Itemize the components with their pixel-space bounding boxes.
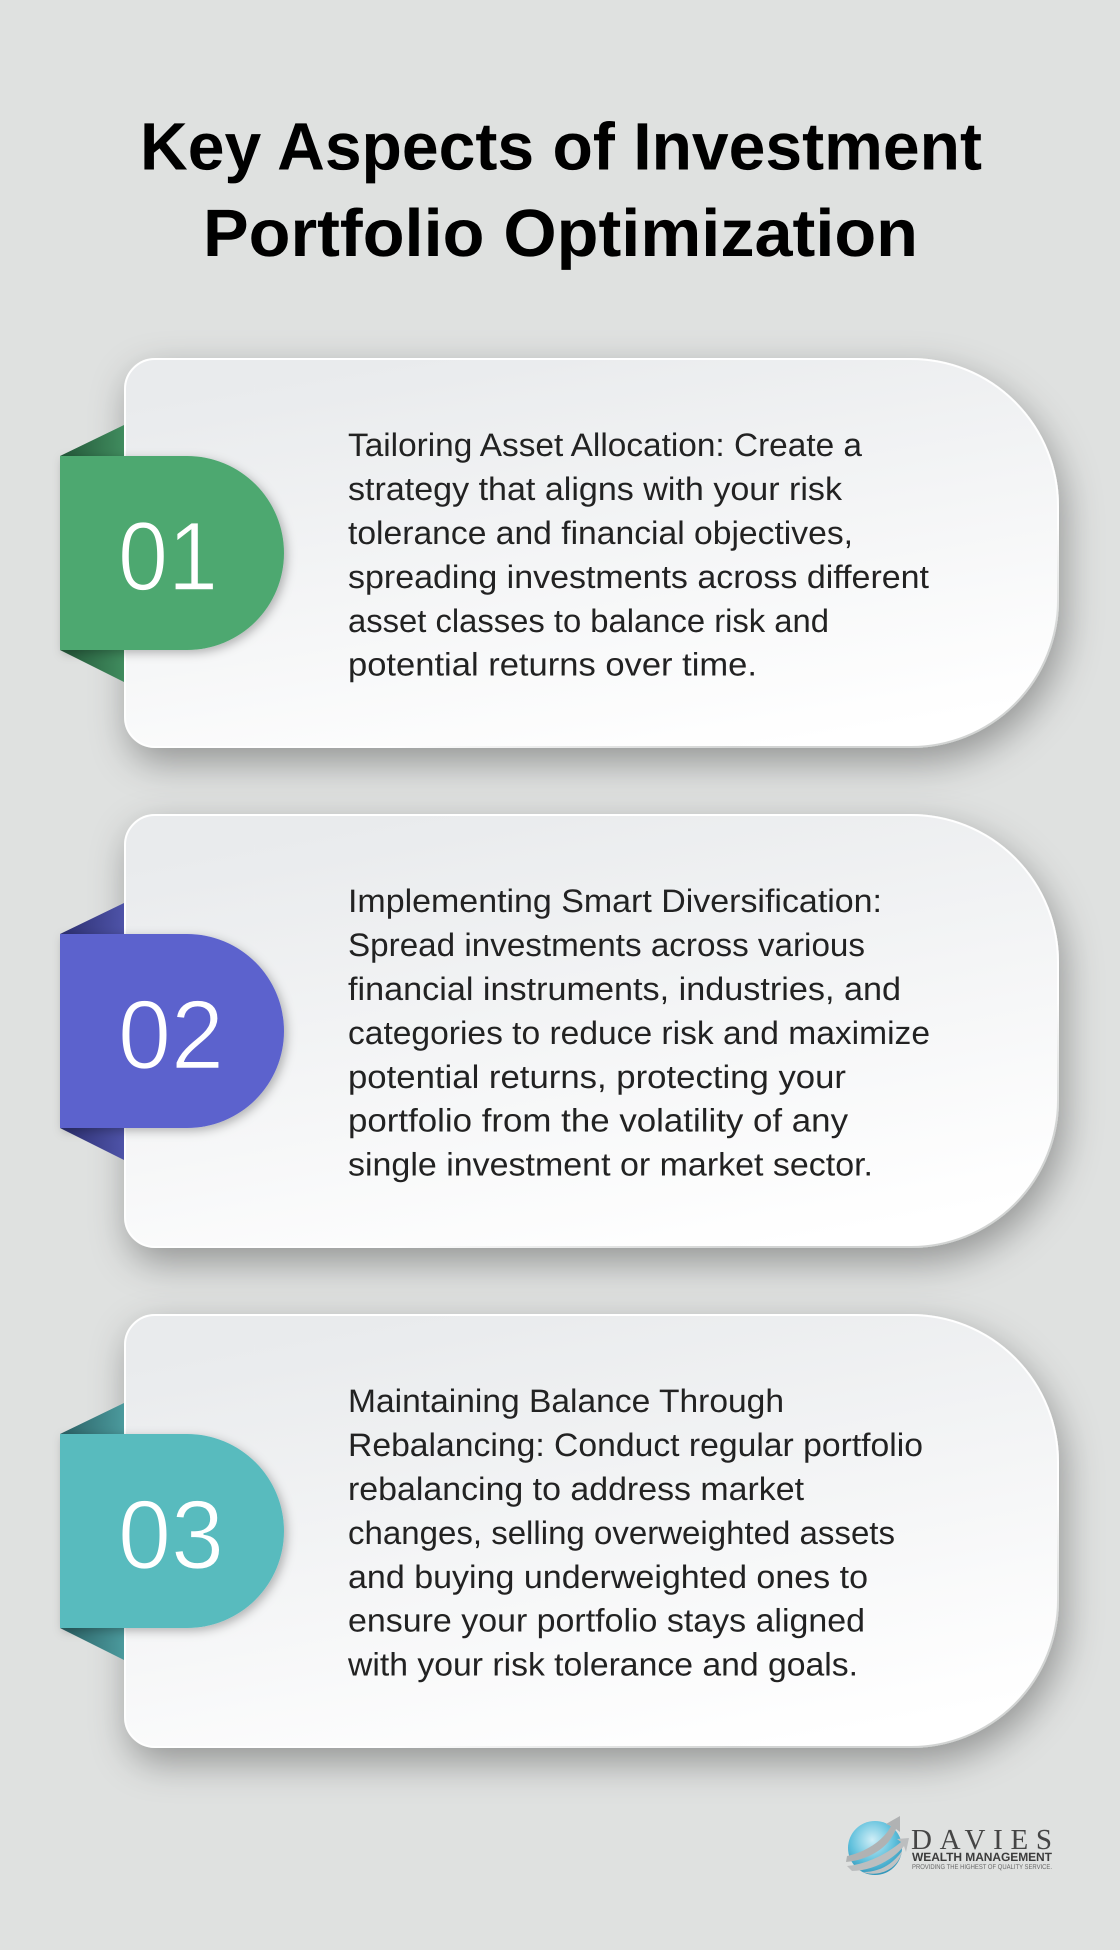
body text 01: potential returns over time. [348,647,757,683]
card background [125,359,1058,747]
icon: globe with arrows [846,1816,909,1875]
body text 02: Spread investments across various [348,927,865,963]
body text 03: rebalancing to address market [348,1471,804,1507]
panel: step 01 asset allocation [60,359,1058,747]
body text 01: Tailoring Asset Allocation: Create a [348,427,863,463]
body text 03 [347,1383,923,1683]
card background [125,815,1058,1247]
logo tagline: PROVIDING THE HIGHEST OF QUALITY SERVICE. [912,1864,1052,1871]
body text 01 [348,427,929,683]
body text 02: portfolio from the volatility of any [348,1103,849,1139]
body text 03: Maintaining Balance Through [348,1383,784,1419]
number badge 02 [60,934,284,1128]
title [140,110,982,271]
ribbon folds [60,425,124,682]
panel: step 03 rebalancing [60,1315,1058,1747]
body text 03: with your risk tolerance and goals. [347,1647,858,1683]
logo: Davies Wealth Management [846,1816,1053,1875]
body text 03: Rebalancing: Conduct regular portfolio [348,1427,923,1463]
ribbon folds [60,903,124,1160]
number badge 03: 03 [118,1479,224,1589]
number badge 01: 01 [118,501,218,611]
body text 02: financial instruments, industries, and [348,971,901,1007]
body text 01: spreading investments across different [348,559,929,595]
body text 02: categories to reduce risk and maximize [348,1015,930,1051]
body text 02: single investment or market sector. [348,1147,873,1183]
body text 01: tolerance and financial objectives, [348,515,853,551]
card background [125,1315,1058,1747]
number badge 03 [60,1434,284,1628]
body text 02: potential returns, protecting your [348,1059,846,1095]
body text 02: Implementing Smart Diversification: [348,883,882,919]
number badge 02: 02 [118,979,224,1089]
body text 03: and buying underweighted ones to [348,1559,868,1595]
ribbon folds [60,1403,124,1660]
body text 01: asset classes to balance risk and [348,603,829,639]
body text 03: ensure your portfolio stays aligned [348,1603,865,1639]
number badge 01 [60,456,284,650]
title: Key Aspects of Investment [140,110,982,184]
logo wordmark: DAVIES [911,1824,1052,1856]
logo subtitle: WEALTH MANAGEMENT [912,1850,1053,1864]
title: Portfolio Optimization [203,196,918,271]
body text 02 [348,883,930,1183]
panel: step 02 diversification [60,815,1058,1247]
body text 01: strategy that aligns with your risk [348,471,843,507]
body text 03: changes, selling overweighted assets [348,1515,895,1551]
